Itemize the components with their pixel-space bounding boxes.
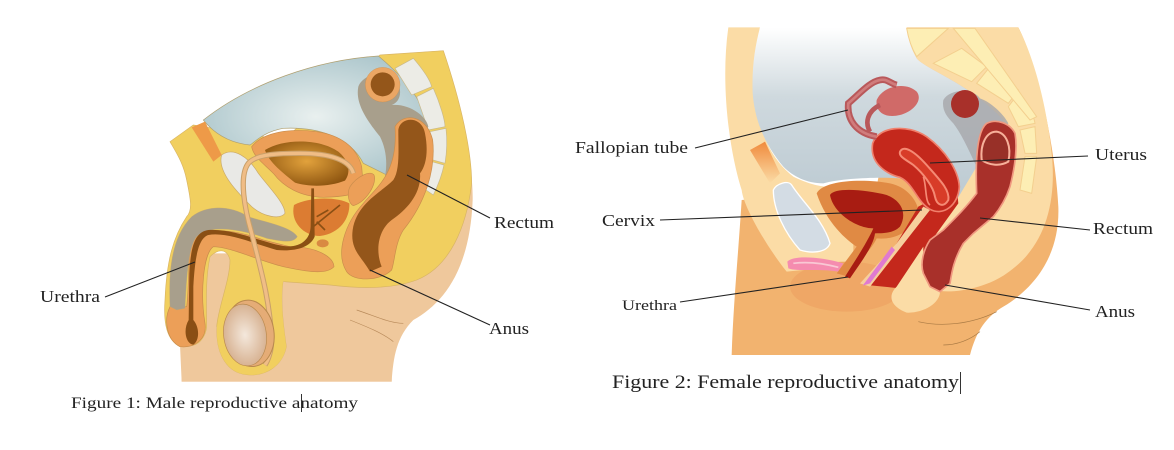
label: Cervix: Cervix bbox=[602, 211, 656, 230]
sigmoid mesentery bbox=[358, 74, 428, 183]
label: Anus (female): Anus bbox=[1095, 302, 1135, 321]
abdominal muscle bbox=[750, 142, 780, 183]
vagina and cervix body bbox=[867, 187, 958, 288]
bladder wall bbox=[252, 130, 363, 197]
perineum bbox=[790, 262, 903, 312]
skin below pelvis bbox=[180, 282, 427, 382]
seminal vesicle bbox=[348, 173, 375, 206]
clitoris bbox=[787, 257, 843, 272]
label: Rectum: Rectum bbox=[494, 213, 554, 232]
fallopian tube bbox=[848, 80, 897, 137]
spine vertebrae bbox=[395, 58, 447, 195]
leader lines bbox=[105, 110, 1090, 325]
bladder lumen bbox=[265, 141, 348, 186]
rectum wall bbox=[342, 118, 433, 279]
label: Rectum (female): Rectum bbox=[1093, 219, 1153, 238]
illustration: male anatomy bbox=[165, 51, 473, 382]
body skin bbox=[182, 51, 473, 382]
skin folds bbox=[350, 310, 403, 342]
prostate bbox=[293, 199, 349, 236]
uterus bbox=[872, 128, 959, 212]
mesentery bbox=[943, 91, 1008, 167]
small gland bbox=[317, 239, 329, 247]
abdominal cavity bbox=[203, 56, 428, 177]
testis bbox=[222, 297, 278, 370]
yellow fat tissue bbox=[165, 51, 472, 375]
vaginal canal bbox=[863, 247, 895, 286]
illustration: female anatomy bbox=[725, 27, 1058, 355]
pubic bone bbox=[773, 183, 830, 252]
back tissue bbox=[897, 27, 1053, 291]
colon cross-section bbox=[365, 67, 400, 102]
label: Urethra (female): Urethra bbox=[622, 298, 678, 314]
caption: figure 1: Figure 1: Male reproductive anatomy bbox=[71, 395, 358, 412]
skin folds bbox=[918, 312, 997, 345]
ovary bbox=[877, 86, 919, 116]
text cursor bbox=[301, 394, 302, 412]
peritoneal cavity bbox=[752, 27, 1003, 200]
corpus cavernosum bbox=[170, 208, 297, 310]
spine bbox=[907, 28, 1037, 193]
label: Urethra: Urethra bbox=[40, 287, 101, 306]
bladder wall bbox=[817, 181, 918, 277]
abdominal wall bbox=[725, 27, 853, 272]
label: Anus: Anus bbox=[489, 319, 529, 338]
label: Fallopian tube: Fallopian tube bbox=[575, 138, 688, 157]
urethra bbox=[186, 188, 315, 345]
penile tissue bbox=[167, 231, 334, 347]
rectum bbox=[922, 121, 1016, 292]
rectal fold bbox=[981, 132, 1009, 165]
pubic bone bbox=[192, 122, 222, 162]
label: Uterus: Uterus bbox=[1095, 145, 1147, 164]
text cursor bbox=[960, 372, 961, 394]
vas deferens bbox=[243, 153, 353, 365]
bladder lumen and urethra bbox=[830, 190, 903, 278]
rectum lumen bbox=[352, 120, 427, 272]
caption: figure 2: Figure 2: Female reproductive anatomy bbox=[612, 373, 960, 393]
colon section bbox=[951, 90, 979, 118]
anal canal bbox=[891, 247, 940, 313]
uterine cavity bbox=[900, 149, 949, 205]
prostate ducts bbox=[313, 205, 340, 230]
body skin bbox=[732, 27, 1058, 355]
